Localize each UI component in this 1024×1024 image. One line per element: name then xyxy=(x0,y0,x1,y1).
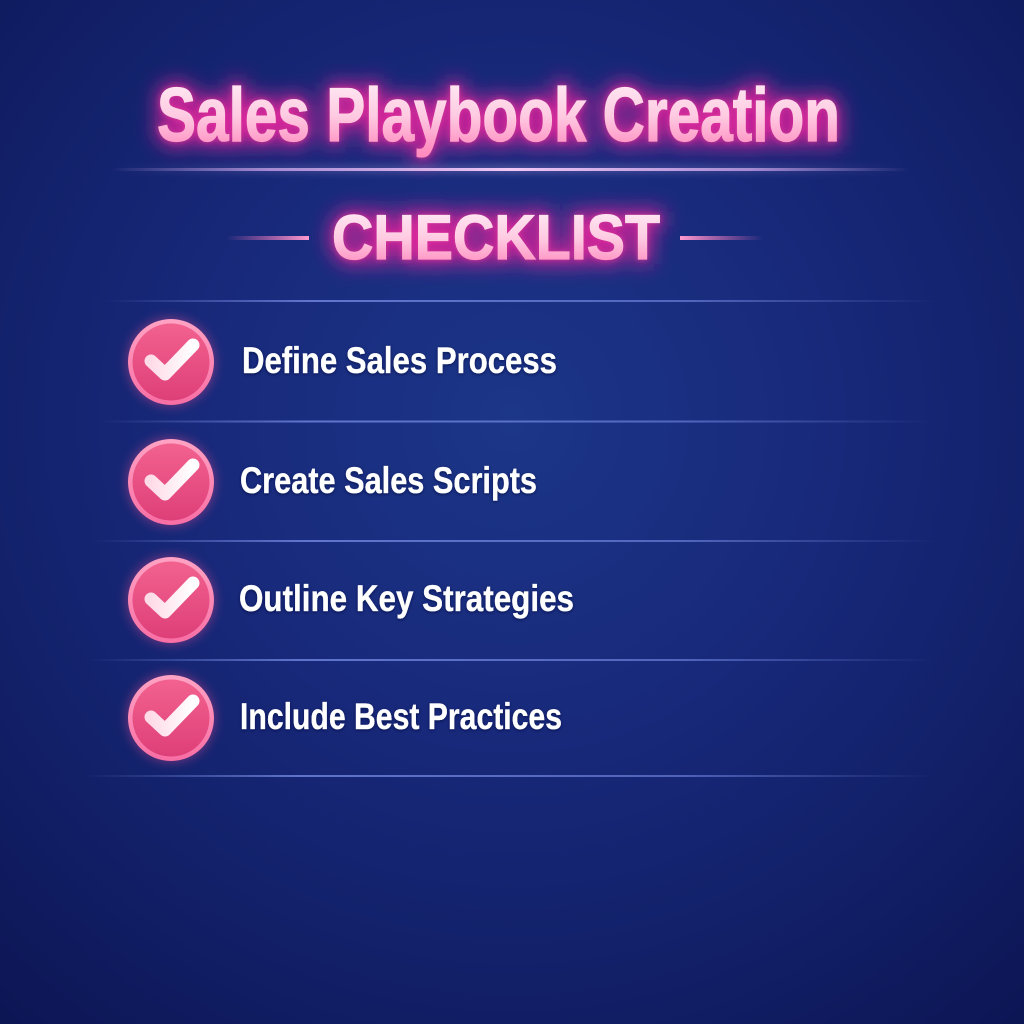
icon: check badge xyxy=(126,555,216,645)
icon: check badge xyxy=(126,673,216,763)
item: Include Best Practices xyxy=(126,673,562,763)
row dividers xyxy=(84,300,935,777)
item: Outline Key Strategies xyxy=(126,555,574,645)
label: Create Sales Scripts xyxy=(240,460,537,501)
title: Sales Playbook Creation xyxy=(157,73,840,158)
subtitle: checklist: CHECKLIST xyxy=(332,203,660,273)
label: Define Sales Process xyxy=(242,340,557,381)
icon: check badge xyxy=(126,317,216,407)
item: Create Sales Scripts xyxy=(126,437,537,527)
subtitle: checklist: CHECKLIST xyxy=(332,203,660,273)
icon: check badge xyxy=(126,437,216,527)
label: Include Best Practices xyxy=(240,696,562,737)
subtitle dash right xyxy=(680,236,763,240)
label: Outline Key Strategies xyxy=(239,578,574,619)
title: Sales Playbook Creation xyxy=(157,73,840,158)
item: Define Sales Process xyxy=(126,317,557,407)
subtitle: checklist: CHECKLIST xyxy=(332,203,660,273)
title: Sales Playbook Creation xyxy=(157,73,840,158)
subtitle dash left xyxy=(226,236,309,240)
title divider xyxy=(110,166,910,172)
